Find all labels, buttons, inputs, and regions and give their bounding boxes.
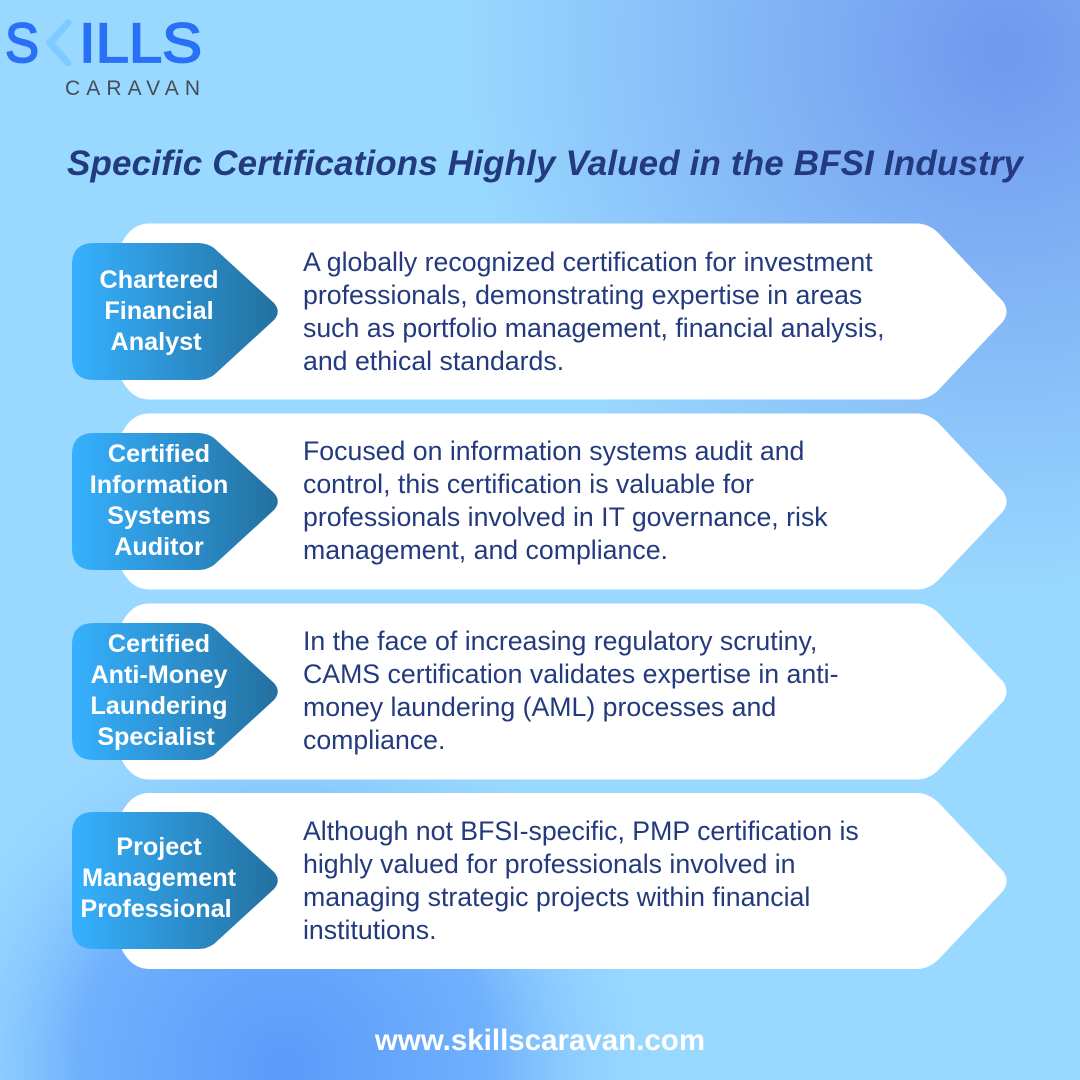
badge label: Information bbox=[90, 471, 228, 499]
badge label: Auditor bbox=[114, 533, 204, 561]
description: highly valued for professionals involved in bbox=[303, 849, 796, 879]
logo: Skills Caravan: ILLS bbox=[79, 11, 202, 74]
title: Specific Certifications Highly Valued in the BFSI Industry bbox=[67, 144, 1025, 183]
description: money laundering (AML) processes and bbox=[303, 692, 776, 722]
badge bbox=[72, 812, 278, 949]
card background bbox=[122, 793, 1006, 969]
description: A globally recognized certification for investment bbox=[303, 247, 873, 277]
badge label: Project bbox=[116, 833, 202, 861]
badge label: Specialist bbox=[97, 723, 215, 751]
description: professionals, demonstrating expertise in areas bbox=[303, 280, 862, 310]
description: and ethical standards. bbox=[303, 346, 564, 376]
description: institutions. bbox=[303, 915, 437, 945]
icon: logo chevron bbox=[50, 23, 68, 63]
badge label: Systems bbox=[107, 502, 211, 530]
logo: Skills Caravan bbox=[5, 11, 202, 100]
panel: Certified Anti-Money Laundering Specialist bbox=[72, 604, 1006, 780]
badge bbox=[72, 243, 278, 380]
badge label: Certified bbox=[108, 440, 210, 468]
footer website: www.skillscaravan.com bbox=[374, 1024, 705, 1057]
description: control, this certification is valuable for bbox=[303, 469, 754, 499]
panel: Certified Information Systems Auditor bbox=[72, 414, 1006, 590]
description: management, and compliance. bbox=[303, 535, 668, 565]
logo: Skills Caravan: CARAVAN bbox=[65, 77, 200, 100]
description: managing strategic projects within financial bbox=[303, 882, 810, 912]
badge label: Anti-Money bbox=[90, 661, 228, 689]
badge bbox=[72, 623, 278, 760]
badge label: Management bbox=[82, 864, 237, 892]
description: such as portfolio management, financial analysis, bbox=[303, 313, 885, 343]
card background bbox=[122, 604, 1006, 780]
description: professionals involved in IT governance, risk bbox=[303, 502, 828, 532]
badge bbox=[72, 433, 278, 570]
description: Focused on information systems audit and bbox=[303, 436, 804, 466]
logo: Skills Caravan: S bbox=[5, 11, 39, 74]
card background bbox=[122, 414, 1006, 590]
description: CAMS certification validates expertise in anti- bbox=[303, 659, 838, 689]
panel: Project Management Professional bbox=[72, 793, 1006, 969]
badge label: Analyst bbox=[110, 328, 202, 356]
card background bbox=[122, 224, 1006, 400]
badge label: Laundering bbox=[90, 692, 228, 720]
badge label: Certified bbox=[108, 630, 210, 658]
description: compliance. bbox=[303, 725, 445, 755]
description: Although not BFSI-specific, PMP certification is bbox=[303, 816, 859, 846]
badge label: Professional bbox=[80, 895, 232, 923]
badge label: Chartered bbox=[100, 266, 218, 294]
description: In the face of increasing regulatory scrutiny, bbox=[303, 626, 817, 656]
panel: Chartered Financial Analyst bbox=[72, 224, 1006, 400]
badge label: Financial bbox=[104, 297, 214, 325]
